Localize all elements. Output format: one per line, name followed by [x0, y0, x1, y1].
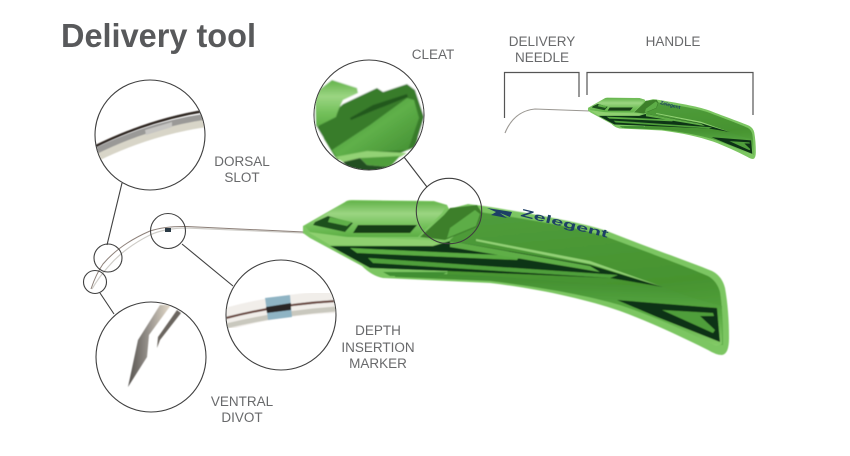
logo mark [487, 208, 512, 218]
small delivery tool overview [505, 98, 756, 159]
label: depth insertion marker: MARKER [349, 356, 407, 371]
title: Delivery tool [61, 17, 256, 54]
detail circle: dorsal slot [94, 80, 210, 190]
label: ventral divot: VENTRAL [211, 394, 273, 409]
label: handle: HANDLE [646, 34, 700, 49]
label: dorsal slot: SLOT [224, 170, 260, 185]
small delivery tool overview: Zelegent [660, 100, 681, 111]
small circle: depth marker [150, 214, 186, 248]
detail circle: depth insertion marker [226, 260, 336, 370]
main handle [303, 200, 729, 355]
label: depth insertion marker: DEPTH [355, 323, 401, 338]
callout lines [100, 157, 427, 314]
small circle: dorsal slot [94, 244, 122, 272]
label: delivery needle: NEEDLE [515, 50, 569, 65]
label: dorsal slot: DORSAL [214, 154, 270, 169]
label: ventral divot: DIVOT [221, 410, 263, 425]
logo text: Zelegent [519, 207, 610, 241]
delivery needle [91, 226, 304, 289]
detail circle: cleat [312, 60, 426, 172]
bracket: handle [587, 72, 753, 115]
bracket: delivery needle [504, 72, 579, 118]
label: cleat: CLEAT [412, 47, 454, 62]
small circle: ventral divot [84, 270, 106, 294]
detail circle: ventral divot [96, 302, 206, 412]
small circle: cleat [416, 178, 482, 244]
label: delivery needle: DELIVERY [509, 34, 575, 49]
label: depth insertion marker: INSERTION [341, 340, 415, 355]
